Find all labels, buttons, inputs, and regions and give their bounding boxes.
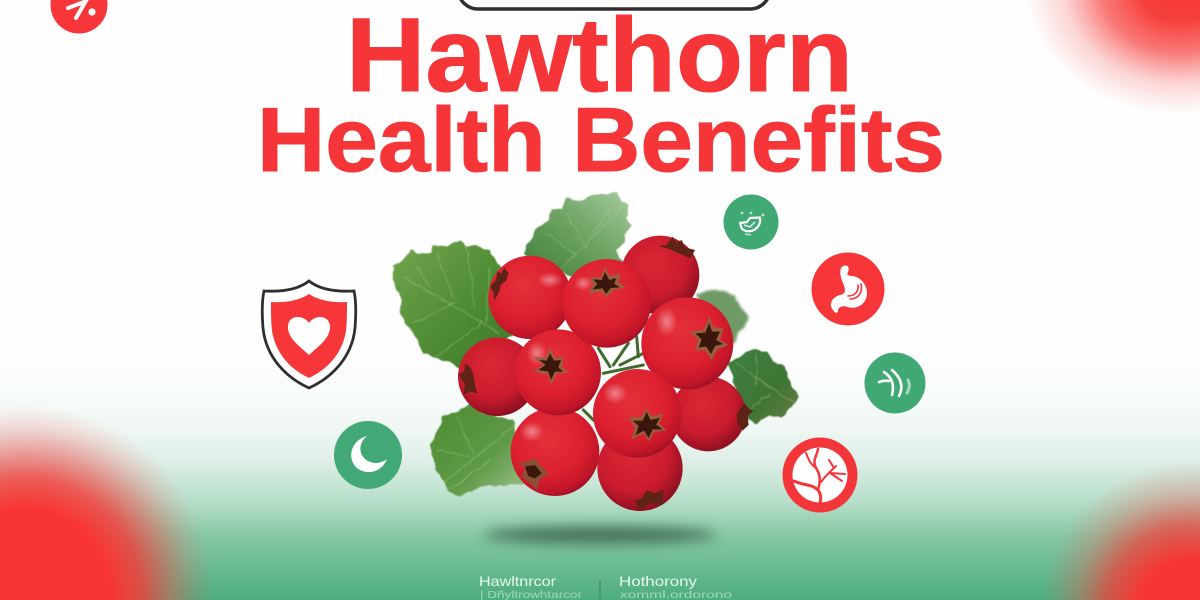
- hawthorn berry cluster: [393, 192, 799, 544]
- title: Health Benefits: [257, 90, 945, 191]
- stems: [583, 337, 643, 420]
- icon: moon: [334, 421, 402, 489]
- leaves: [393, 192, 799, 497]
- berry: top centre: [562, 259, 651, 348]
- title: [257, 0, 945, 191]
- berry: back left: [458, 337, 537, 416]
- cropped badge outline at top: [458, 0, 770, 9]
- berry: back top right: [621, 236, 699, 314]
- left label: Hawltnrcor: [479, 573, 556, 589]
- berry: back right: [671, 377, 753, 451]
- title: Hawthorn: [346, 0, 853, 114]
- icon: stomach: [812, 252, 884, 326]
- right label: [619, 573, 733, 600]
- berry: lower left: [511, 407, 599, 496]
- icon: shield with heart: [262, 281, 356, 388]
- icon: skin / lips: [724, 194, 778, 250]
- shadow under cluster: [483, 526, 717, 544]
- left label: [479, 573, 583, 600]
- divider: [599, 580, 601, 600]
- right label: Hothorony: [619, 573, 697, 589]
- leaf veins: [403, 207, 793, 490]
- soft rear leaves: [697, 289, 748, 343]
- berry: bottom: [597, 426, 683, 511]
- berry: centre left: [515, 329, 601, 415]
- top-left cropped red icon: [50, 0, 108, 34]
- berry: centre lower: [593, 369, 682, 458]
- icon: blood vessels: [782, 438, 858, 512]
- berry: right: [641, 297, 733, 389]
- icon: sound waves: [864, 352, 926, 414]
- berry: upper left: [488, 256, 572, 339]
- bottom labels: [479, 573, 733, 600]
